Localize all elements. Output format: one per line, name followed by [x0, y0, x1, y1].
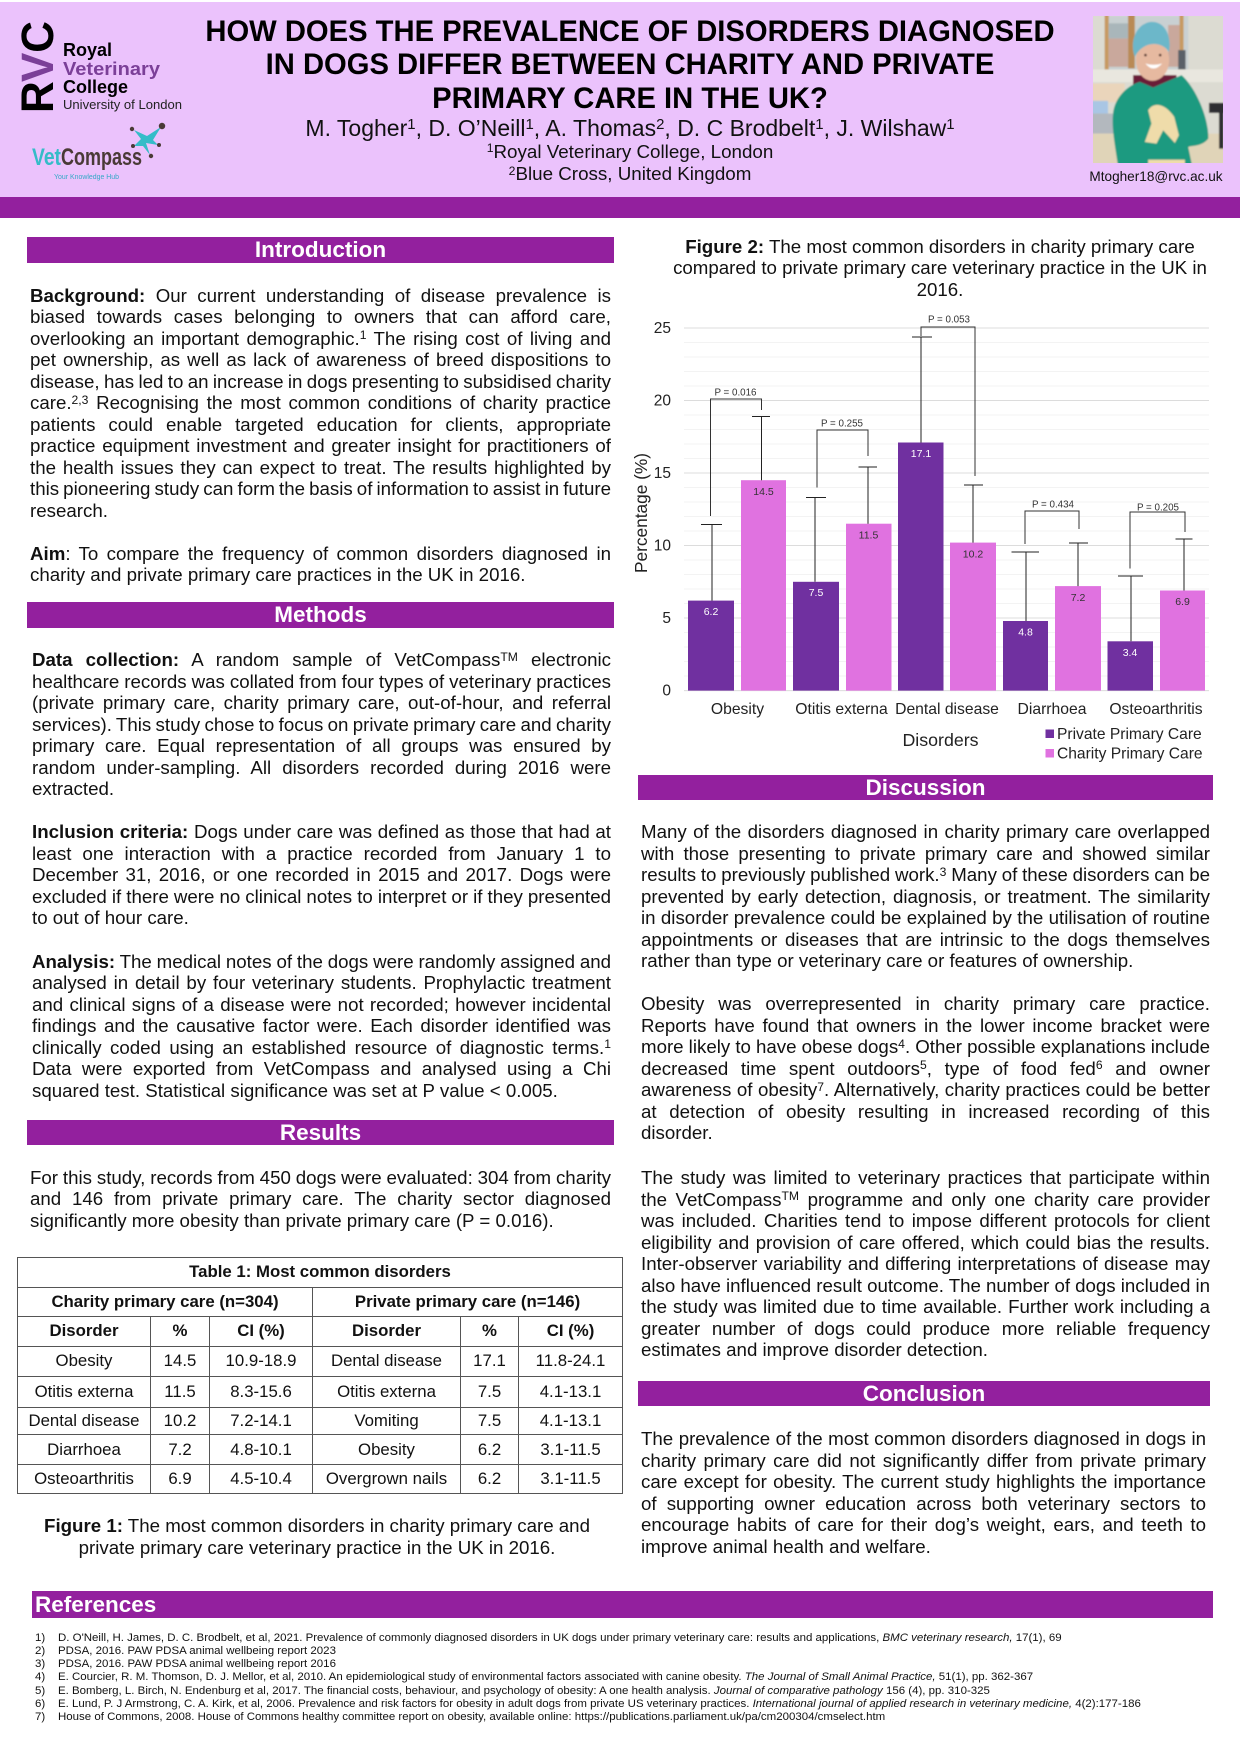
reference list: 4): [35, 1671, 45, 1683]
text: Inclusion criteria: excluded if there were no clinical notes to interpret or if they presented: [32, 886, 611, 907]
table: most common disorders: 7.2-14.1: [230, 1411, 292, 1430]
text: Analysis: analysed in detail by four veterinary students. Prophylactic treatment: [32, 972, 611, 993]
text: Discussion paragraph 1: prevented by early detection, diagnosis, or treatment. The similarity: [641, 886, 1210, 907]
header purple strip: [0, 197, 1240, 218]
table: most common disorders: 7.2: [168, 1440, 192, 1458]
error bars: [701, 337, 1192, 641]
text: Conclusion: [641, 1428, 1206, 1557]
logo: Royal Veterinary College: University of London: [63, 98, 182, 112]
text: Discussion paragraph 2: Reports have found that owners in the lower income bracket were: [641, 1015, 1210, 1036]
text: Discussion paragraph 3: also have influenced result outcome. The number of dogs included in: [641, 1275, 1210, 1296]
table: most common disorders: 4.1-13.1: [540, 1411, 601, 1430]
p-value labels: P = 0.016: [714, 388, 757, 398]
table: most common disorders: 4.1-13.1: [540, 1382, 601, 1401]
table: most common disorders: Disorder: [49, 1321, 118, 1340]
text: Discussion paragraph 2: disorder.: [641, 1122, 713, 1143]
text: Data collection: extracted.: [32, 778, 114, 799]
table: most common disorders: Otitis externa: [337, 1382, 436, 1401]
text: Background: Background: Our current understanding of disease prevalence is: [30, 285, 611, 306]
text: Aim: [30, 543, 611, 585]
heading: Methods: Methods: [274, 602, 367, 626]
text: Analysis: [32, 951, 611, 1101]
affiliations: 2Blue Cross, United Kingdom: [509, 163, 751, 184]
heading: References: [32, 1591, 1213, 1618]
heading: Results: Results: [280, 1120, 361, 1145]
text: Conclusion: charity primary care did not significantly differ from private primary: [641, 1450, 1206, 1471]
text: Analysis: Analysis: The medical notes of the dogs were randomly assigned and: [32, 951, 611, 972]
data labels: 7.5: [809, 587, 823, 599]
text: Background: biased towards cases belonging to owners that can afford care,: [30, 306, 611, 327]
y axis values: 15: [654, 465, 671, 482]
table: most common disorders: 10.2: [164, 1411, 196, 1430]
bars: charity primary care: [741, 480, 1205, 691]
text: Discussion paragraph 3: Inter-observer variability and differing interpretations of disease may: [641, 1253, 1210, 1274]
logo: VetCompass: Vet: [32, 144, 61, 171]
table: most common disorders: 14.5: [164, 1351, 196, 1370]
table: most common disorders: 3.1-11.5: [540, 1469, 601, 1488]
text: Results: [30, 1167, 611, 1231]
text: Discussion paragraph 2: awareness of obesity7. Alternatively, charity practices could be better: [641, 1079, 1210, 1100]
table: most common disorders: CI (%): [547, 1321, 594, 1340]
table: most common disorders: 11.8-24.1: [536, 1351, 605, 1370]
table: most common disorders: Obesity: [358, 1440, 415, 1458]
text: Data collection: primary care. Equal representation of all groups was ensured by: [32, 735, 611, 756]
table: most common disorders: Dental disease: [28, 1411, 140, 1430]
text: Data collection: services). This study chose to focus on private primary care and charity: [32, 714, 611, 735]
bars: private primary care: [688, 442, 1153, 691]
table: most common disorders: Table 1: Most common disorders: [189, 1262, 451, 1281]
y axis values: 25: [654, 320, 671, 337]
logo: VetCompass: Your Knowledge Hub: [54, 172, 119, 181]
text: Discussion paragraph 3: [641, 1167, 1210, 1360]
table: most common disorders: 6.2: [478, 1440, 501, 1458]
heading: Results: [27, 1120, 614, 1145]
table: most common disorders: 7.5: [478, 1382, 501, 1401]
y axis values: [654, 320, 671, 700]
title: IN DOGS DIFFER BETWEEN CHARITY AND PRIVATE: [266, 49, 994, 81]
x axis labels: Osteoarthritis: [1109, 701, 1203, 718]
text: Analysis: and clinical signs of a disease were not recorded; however incidental: [32, 994, 611, 1015]
table: most common disorders: 11.5: [164, 1382, 196, 1401]
reference list: 1): [35, 1632, 45, 1644]
bar chart: disorder prevalence: 11.5: [859, 530, 878, 542]
text: Results: and 146 from private primary care. The charity sector diagnosed: [30, 1188, 611, 1209]
table: most common disorders: 4.5-10.4: [230, 1469, 292, 1488]
caption: Figure 2: [673, 236, 1207, 300]
text: Background: practice equipment investment and greater insight for practitioners of: [30, 435, 611, 456]
text: Discussion paragraph 3: estimates and improve disorder detection.: [641, 1339, 988, 1360]
logo: Royal Veterinary College: College: [63, 77, 128, 97]
table: most common disorders: 7.5: [478, 1411, 501, 1430]
logo: Royal Veterinary College: Royal: [63, 40, 112, 60]
bar chart: disorder prevalence: 7.2: [1071, 592, 1085, 604]
reference list: 2): [35, 1645, 45, 1657]
photo of author: [1093, 16, 1223, 163]
text: Discussion paragraph 1: [641, 821, 1210, 971]
text: Background: patients could enable targeted education for clients, appropriate: [30, 414, 611, 435]
reference list: PDSA, 2016. PAW PDSA animal wellbeing report 2023: [58, 1645, 336, 1657]
text: Data collection: [32, 649, 611, 799]
p-value labels: P = 0.434: [1032, 500, 1075, 510]
y axis values: 5: [662, 610, 671, 627]
heading: Introduction: [27, 237, 614, 263]
text: Discussion paragraph 1: with those presenting to private primary care and showed similar: [641, 843, 1210, 864]
x axis title: Disorders: [902, 730, 979, 750]
text: Discussion paragraph 3: the VetCompassTM programme and only one charity care provider: [641, 1189, 1210, 1210]
table: most common disorders: Vomiting: [354, 1411, 419, 1430]
text: Inclusion criteria: least one interaction with a practice recorded from January 1 to: [32, 843, 611, 864]
table: most common disorders: Private primary care (n=146): [355, 1292, 580, 1311]
text: Inclusion criteria: [32, 821, 611, 928]
title: [205, 16, 1055, 114]
text: Analysis: clinically coded using an established resource of diagnostic terms.1: [32, 1037, 611, 1058]
reference list: 3): [35, 1658, 45, 1670]
heading: Conclusion: Conclusion: [863, 1381, 985, 1406]
data labels: 3.4: [1123, 647, 1137, 659]
affiliations: 1Royal Veterinary College, London: [487, 140, 773, 162]
table: most common disorders: Disorder: [352, 1321, 421, 1340]
text: Discussion paragraph 1: results to previously published work.3 Many of these disorders can be: [641, 864, 1210, 885]
text: Background: this pioneering study can form the basis of information to assist in future: [30, 478, 611, 499]
table: most common disorders: 10.9-18.9: [226, 1351, 296, 1370]
x axis labels: Otitis externa: [795, 701, 888, 718]
bar chart: disorder prevalence: 10.2: [963, 548, 983, 560]
table: most common disorders: 4.8-10.1: [230, 1440, 292, 1458]
affiliations: [487, 140, 773, 184]
heading: Introduction: Introduction: [255, 237, 386, 262]
table: most common disorders: Obesity: [56, 1351, 112, 1370]
text: Inclusion criteria: Inclusion criteria: Dogs under care was defined as those that had at: [32, 821, 611, 842]
bar chart: disorder prevalence: [631, 314, 1209, 762]
text: Data collection: healthcare records was collated from four types of veterinary practices: [32, 671, 611, 692]
text: Discussion paragraph 3: greater number of dogs could produce more reliable frequency: [641, 1318, 1210, 1339]
bar chart: disorder prevalence: 6.9: [1175, 596, 1190, 608]
reference list: E. Bomberg, L. Birch, N. Endenburg et al, 2017. The financial costs, behaviour, and psychology of obesity: A one health analysis. Journal of comparative pathology 156 (4), pp. 310-325: [58, 1685, 990, 1697]
table: most common disorders: Otitis externa: [35, 1382, 133, 1401]
table: most common disorders: %: [173, 1321, 187, 1340]
text: Background: [30, 285, 611, 521]
text: Conclusion: encourage habits of care for their dog’s weight, ears, and teeth to: [641, 1514, 1206, 1535]
text: Discussion paragraph 1: in disorder prevalence could be explained by the utilisation of routine: [641, 907, 1210, 928]
text: Discussion paragraph 1: Many of the disorders diagnosed in charity primary care overlapped: [641, 821, 1210, 842]
heading: Methods: [27, 602, 614, 628]
table: most common disorders: 6.9: [168, 1469, 192, 1488]
text: Data collection: random under-sampling. All disorders recorded during 2016 were: [32, 757, 611, 778]
p-value labels: P = 0.053: [928, 314, 971, 326]
text: Background: research.: [30, 500, 108, 521]
logo: Royal Veterinary College: Veterinary: [63, 59, 160, 79]
text: Discussion paragraph 2: more likely to have obese dogs4. Other possible explanations include: [641, 1036, 1210, 1057]
caption: Figure 1: Figure 1: The most common disorders in charity primary care and: [44, 1515, 590, 1536]
table: most common disorders: [17, 1257, 623, 1494]
text: Results: For this study, records from 450 dogs were evaluated: 304 from charity: [30, 1167, 611, 1188]
heading: Discussion: Discussion: [865, 775, 986, 800]
logo: VetCompass: [32, 122, 166, 181]
p-value labels: [714, 314, 1180, 514]
text: Discussion paragraph 3: The study was limited to veterinary practices that participate within: [641, 1167, 1210, 1188]
text: Conclusion: care except for obesity. The current study highlights the importance: [641, 1471, 1206, 1492]
table: most common disorders: Overgrown nails: [326, 1469, 447, 1488]
text: Background: the health issues they can expect to treat. The results highlighted by: [30, 457, 611, 478]
table: most common disorders: 6.2: [478, 1469, 501, 1488]
text: Discussion paragraph 1: appointments or diseases that are intrinsic to the dogs themselves: [641, 929, 1210, 950]
table: most common disorders: 17.1: [473, 1351, 506, 1370]
text: Results: significantly more obesity than private primary care (P = 0.016).: [30, 1210, 554, 1231]
text: Background: overlooking an important demographic.1 The rising cost of living and: [30, 328, 611, 349]
caption: Figure 1: [44, 1515, 590, 1558]
text: Background: disease, has led to an increase in dogs presenting to subsidised charity: [30, 371, 611, 392]
table: most common disorders: Osteoarthritis: [34, 1469, 134, 1488]
heading: References: References: [35, 1592, 156, 1617]
reference list: E. Courcier, R. M. Thomson, D. J. Mellor, et al, 2010. An epidemiological study of environmental factors associated with canine obesity. The Journal of Small Animal Practice, 51(1), pp. 362-367: [58, 1671, 1033, 1683]
data labels: 6.2: [704, 606, 718, 618]
caption: Figure 1: private primary care veterinary practice in the UK in 2016.: [79, 1536, 555, 1558]
significance brackets: [710, 327, 1185, 568]
x axis labels: Dental disease: [895, 701, 999, 718]
logo: Royal Veterinary College: [15, 21, 182, 113]
text: Discussion paragraph 2: [641, 993, 1210, 1143]
data labels: 4.8: [1018, 626, 1033, 638]
y axis title: Percentage (%): [631, 453, 651, 573]
reference list: House of Commons, 2008. House of Commons healthy committee report on obesity, available online: https://publications.parliament.uk/pa/cm200304/cmselect.htm: [58, 1711, 885, 1723]
text: Discussion paragraph 3: eligibility and provision of care offered, which could bias the results.: [641, 1232, 1210, 1253]
reference list: E. Lund, P. J Armstrong, C. A. Kirk, et al, 2006. Prevalence and risk factors for obesity in adult dogs from private US veterinary practices. International journal of applied research in veterinary medicine, 4(2):177-186: [58, 1698, 1141, 1710]
legend: Charity Primary Care: [1057, 746, 1203, 762]
legend: Private Primary Care: [1057, 726, 1202, 743]
reference list: 5): [35, 1685, 45, 1697]
caption: Figure 2: 2016.: [917, 278, 963, 300]
text: Discussion paragraph 1: rather than type or veterinary care or features of ownership.: [641, 950, 1133, 971]
text: Analysis: squared test. Statistical significance was set at P value < 0.005.: [32, 1080, 558, 1101]
y axis values: 0: [662, 682, 671, 700]
text: Conclusion: of supporting owner education across both veterinary sectors to: [641, 1493, 1206, 1514]
reference list: D. O'Neill, H. James, D. C. Brodbelt, et al, 2021. Prevalence of commonly diagnosed disorders in UK dogs under primary veterinary care: results and applications, BMC veterinary research, 17(1), 69: [58, 1632, 1062, 1644]
text: Conclusion: improve animal health and welfare.: [641, 1536, 931, 1557]
text: Inclusion criteria: to out of hour care.: [32, 907, 189, 928]
p-value labels: P = 0.255: [821, 418, 864, 430]
text: Data collection: Data collection: A random sample of VetCompassTM electronic: [32, 649, 611, 670]
reference list: [35, 1632, 1141, 1723]
text: Background: care.2,3 Recognising the most common conditions of charity practice: [30, 392, 611, 413]
caption: Figure 2: compared to private primary care veterinary practice in the UK in: [673, 257, 1207, 278]
table: most common disorders: 8.3-15.6: [230, 1382, 292, 1401]
text: Discussion paragraph 3: was included. Charities tend to impose different protocols for client: [641, 1210, 1210, 1231]
x axis labels: [711, 701, 1203, 718]
table: most common disorders: Diarrhoea: [47, 1440, 121, 1458]
text: Analysis: Data were exported from VetCompass and analysed using a Chi: [32, 1058, 611, 1079]
text: Aim: charity and private primary care practices in the UK in 2016.: [30, 564, 525, 585]
y axis values: 20: [654, 392, 671, 410]
title: PRIMARY CARE IN THE UK?: [432, 82, 828, 114]
caption: Figure 2: Figure 2: The most common disorders in charity primary care: [685, 236, 1195, 256]
data labels: 17.1: [911, 448, 931, 460]
table: most common disorders: %: [482, 1321, 497, 1340]
text: Discussion paragraph 2: Obesity was overrepresented in charity primary care practice.: [641, 993, 1210, 1014]
x axis labels: Obesity: [711, 701, 764, 718]
p-value labels: P = 0.205: [1137, 502, 1180, 514]
header band: [0, 2, 1240, 197]
data labels: [704, 448, 1137, 659]
logo: VetCompass: Compass: [61, 144, 142, 171]
text: Discussion paragraph 2: at detection of obesity resulting in increased recording of this: [641, 1101, 1210, 1122]
table: most common disorders: CI (%): [237, 1321, 285, 1340]
text: Analysis: findings and the causative factor were. Each disorder identified was: [32, 1015, 611, 1036]
table: most common disorders: 3.1-11.5: [540, 1440, 601, 1458]
authors: M. Togher1, D. O’Neill1, A. Thomas2, D. C Brodbelt1, J. Wilshaw1: [305, 115, 955, 141]
legend: [1046, 726, 1203, 762]
text: Discussion paragraph 3: the study was limited due to time available. Further work including a: [641, 1296, 1210, 1317]
text: Aim: Aim: To compare the frequency of common disorders diagnosed in: [30, 543, 611, 564]
table: most common disorders: Charity primary care (n=304): [51, 1292, 279, 1311]
text: Conclusion: The prevalence of the most common disorders diagnosed in dogs in: [641, 1428, 1206, 1449]
heading: Discussion: [638, 775, 1213, 800]
text: Background: pet ownership, as well as lack of awareness of breed dispositions to: [30, 349, 611, 370]
heading: Conclusion: [638, 1381, 1210, 1406]
x axis labels: Diarrhoea: [1018, 701, 1087, 718]
bar chart: disorder prevalence: 14.5: [753, 486, 774, 498]
email: Mtogher18@rvc.ac.uk: [1089, 169, 1223, 184]
reference list: 7): [35, 1711, 45, 1723]
title: HOW DOES THE PREVALENCE OF DISORDERS DIAGNOSED: [205, 16, 1055, 48]
table: most common disorders: Dental disease: [331, 1351, 442, 1370]
icon: VetCompass star: [130, 123, 165, 158]
reference list: 6): [35, 1698, 45, 1710]
y axis values: 10: [654, 538, 671, 554]
text: Data collection: (private primary care, charity primary care, out-of-hour, and referral: [32, 692, 611, 713]
text: Inclusion criteria: December 31, 2016, or one recorded in 2015 and 2017. Dogs were: [32, 864, 611, 885]
text: Discussion paragraph 2: decreased time spent outdoors5, type of food fed6 and owner: [641, 1058, 1210, 1079]
reference list: PDSA, 2016. PAW PDSA animal wellbeing report 2016: [58, 1658, 336, 1670]
